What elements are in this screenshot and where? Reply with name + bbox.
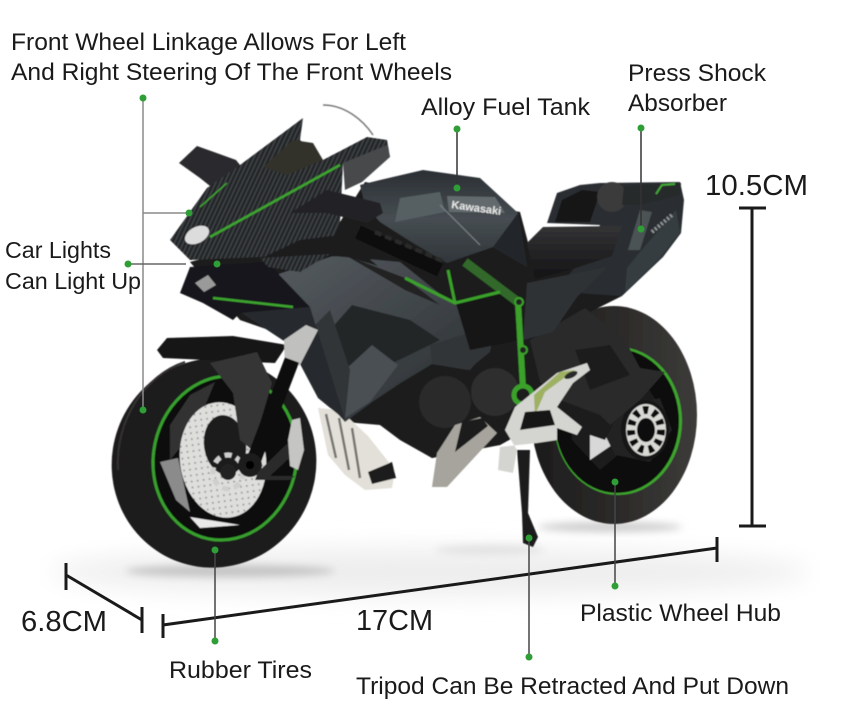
- front wheel: [82, 329, 346, 597]
- callout: tripod: [356, 534, 789, 700]
- headlight: [182, 222, 212, 248]
- fuel tank: [360, 170, 527, 267]
- tail section: [523, 182, 684, 340]
- callout: car lights: [5, 237, 220, 294]
- callout: press shock absorber: Press Shock: [628, 60, 767, 87]
- dark body silhouette backing: [190, 182, 640, 458]
- callout: car lights: Car Lights: [5, 237, 111, 263]
- callout: car lights: Can Light Up: [5, 268, 141, 294]
- callout: plastic wheel hub: [580, 478, 781, 627]
- engine: [345, 300, 545, 487]
- dimension: height: [705, 170, 808, 526]
- cables and handlebar area: [345, 232, 520, 350]
- silver footpeg bracket: [498, 363, 590, 473]
- backrest: [597, 182, 627, 212]
- front fairing nose: [170, 105, 390, 320]
- main side fairing: [240, 256, 495, 422]
- logo text: Kawasaki: [451, 199, 502, 218]
- kickstand: [517, 450, 538, 547]
- windshield: [323, 105, 373, 135]
- dimension: depth: [21, 563, 142, 638]
- callout: front wheel linkage: And Right Steering Of The Front Wheels: [11, 59, 452, 86]
- side wing: [290, 190, 383, 223]
- callout: rubber tires: Rubber Tires: [169, 657, 312, 684]
- motorcycle: [82, 105, 697, 597]
- callout: press shock absorber: Absorber: [628, 90, 727, 117]
- dimension: depth: 6.8CM: [21, 606, 107, 638]
- dimension: length: 17CM: [356, 605, 433, 637]
- green stripes: [210, 165, 340, 237]
- callout: alloy fuel tank: Alloy Fuel Tank: [421, 94, 591, 121]
- floor shadow: [50, 522, 810, 596]
- dimension: length: [163, 537, 717, 638]
- side fin: [179, 146, 240, 190]
- callout: press shock absorber: [628, 60, 767, 232]
- rear wheel: [531, 306, 697, 524]
- callout: tripod: Tripod Can Be Retracted And Put Down: [356, 673, 789, 700]
- exhaust pipes: [318, 408, 396, 490]
- carbon cowl: [170, 118, 390, 260]
- dimension: height: 10.5CM: [705, 170, 808, 202]
- swingarm: [530, 308, 665, 425]
- icon: brake disc: [172, 397, 274, 523]
- visor: [263, 140, 323, 175]
- icon: rear wheel hub: [600, 398, 672, 462]
- front fork and mudguard: [157, 325, 318, 480]
- green frame: [405, 262, 532, 404]
- icon: brake caliper: [288, 418, 304, 470]
- text: front wheel linkage heading: Front Wheel Linkage Allows For Left: [11, 29, 406, 56]
- callout: rubber tires: [169, 546, 312, 684]
- seat: [527, 226, 622, 279]
- lower nose: [180, 262, 310, 320]
- callout: front wheel linkage: [11, 29, 452, 414]
- callout: plastic wheel hub: Plastic Wheel Hub: [580, 600, 781, 627]
- callout: alloy fuel tank: [421, 94, 591, 192]
